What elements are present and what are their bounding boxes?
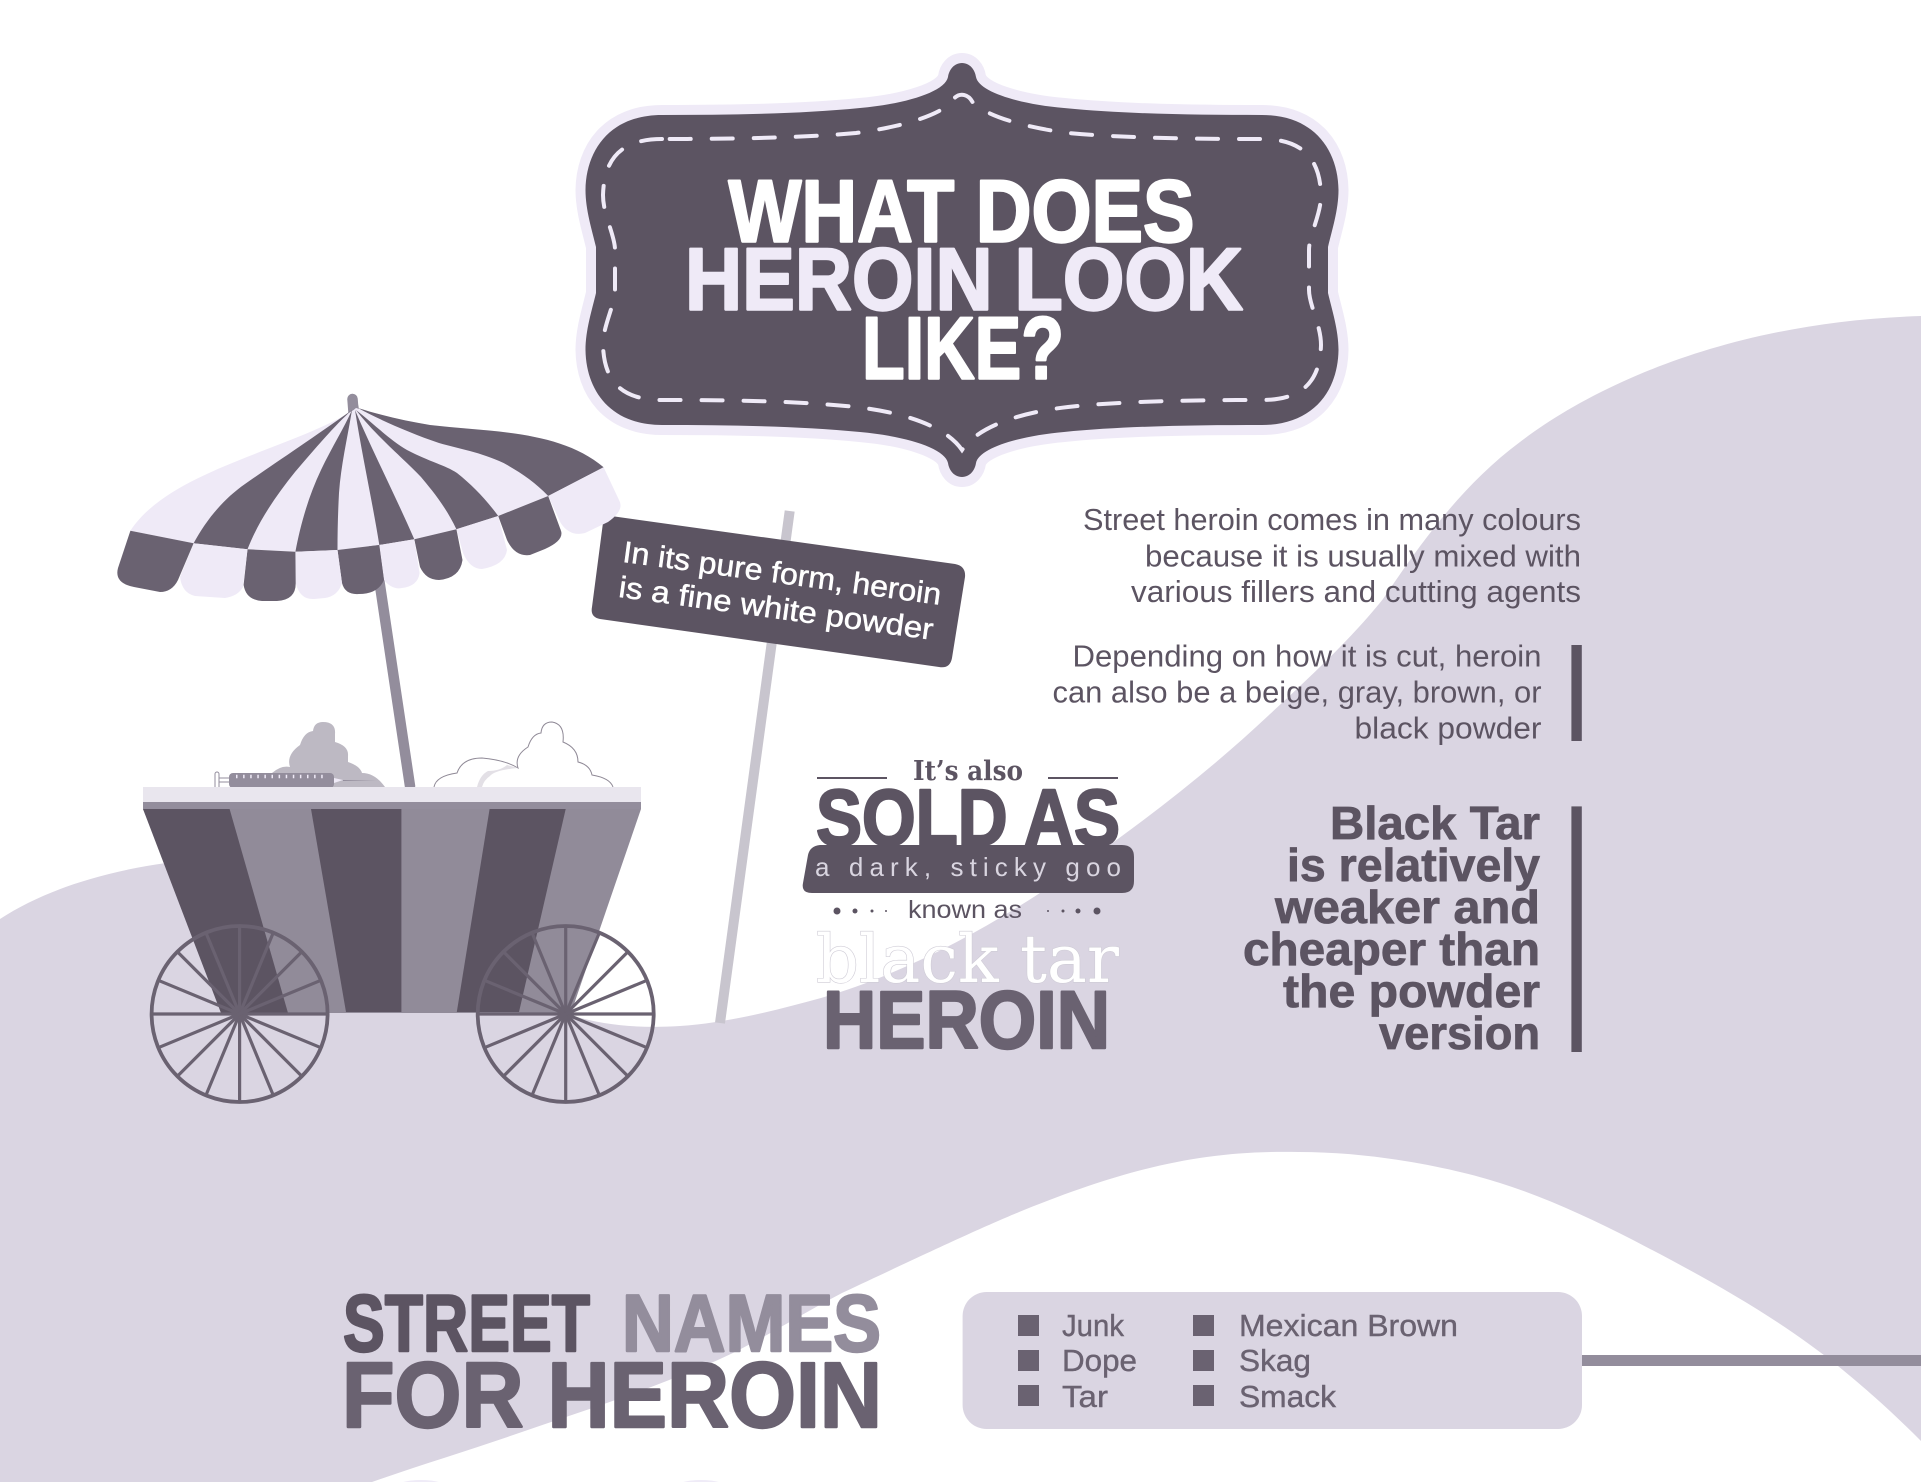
cart body light (143, 809, 641, 1013)
cart (143, 787, 654, 1102)
stitched dashed border (603, 95, 1321, 450)
names: Dope (1062, 1343, 1137, 1378)
names: Tar (1062, 1379, 1108, 1414)
text: many colours (1083, 502, 1581, 609)
text: black tar is weaker: cheaper than (1243, 923, 1540, 975)
title text: HEROIN LOOK (685, 230, 1243, 328)
black tar: black tar (816, 921, 1119, 998)
umbrella pole (352, 399, 410, 786)
dark powder pile (262, 722, 385, 787)
text: black tar is weaker: weaker and (1274, 881, 1540, 933)
title text (685, 162, 1243, 398)
text: black tar is weaker: version (1379, 1007, 1540, 1059)
rule left (817, 777, 887, 779)
it's also: It’s also (913, 756, 1023, 787)
wheel: right (478, 926, 654, 1102)
text: many colours: various fillers and cutting agents (1131, 574, 1581, 609)
text: black tar is weaker (1243, 797, 1540, 1059)
names: Skag (1239, 1343, 1311, 1378)
street names panel (963, 1292, 1582, 1429)
goo pill (803, 845, 1134, 893)
title text: LIKE? (862, 298, 1064, 398)
text: black tar is weaker: the powder (1283, 965, 1540, 1017)
text: depending on cut (1052, 638, 1542, 746)
umbrella (117, 399, 621, 786)
names: Junk (1062, 1308, 1124, 1343)
goo text: a dark, sticky goo (815, 852, 1121, 882)
signpost (592, 511, 965, 1023)
text: black tar is weaker: Black Tar (1330, 797, 1540, 849)
text: depending on cut: Depending on how it is cut, heroin (1072, 638, 1542, 673)
accent bar (1571, 645, 1582, 741)
bottom edge arcs (393, 1480, 729, 1482)
banner shape (586, 63, 1338, 477)
text: depending on cut: black powder (1354, 710, 1542, 746)
wheel: left (152, 926, 328, 1102)
street names heading: NAMES (622, 1279, 881, 1369)
names: Smack (1239, 1379, 1337, 1414)
cart board (143, 787, 641, 802)
white powder pile (434, 722, 613, 787)
sign text: is a fine white powder (617, 571, 935, 647)
rule right (1048, 777, 1118, 779)
accent bar (1571, 806, 1582, 1052)
street names heading: STREET (343, 1279, 590, 1369)
sold as: SOLD AS (816, 773, 1120, 862)
sign text (617, 536, 943, 647)
sign board (592, 515, 965, 667)
title text: WHAT DOES (728, 162, 1194, 260)
background wave (0, 316, 1921, 1482)
names: Mexican Brown (1239, 1308, 1458, 1343)
known as: known as (908, 896, 1022, 924)
canopy dark stripes (194, 408, 604, 552)
canopy scallops (117, 467, 621, 601)
title banner (586, 63, 1338, 477)
cart body dark stripes (143, 809, 566, 1013)
bullets (1018, 1315, 1214, 1406)
dotted row (834, 908, 1100, 914)
street names heading (342, 1279, 882, 1447)
canopy (130, 408, 604, 552)
sign pole (720, 511, 790, 1023)
text: black tar is weaker: is relatively (1287, 839, 1540, 891)
street names heading: FOR HEROIN (342, 1343, 882, 1447)
powder fold (477, 765, 518, 787)
connector bar (1582, 1355, 1921, 1366)
heroin: HEROIN (823, 975, 1110, 1066)
text: many colours: Street heroin comes in many colours (1083, 502, 1581, 537)
names (1062, 1308, 1458, 1414)
text: many colours: because it is usually mixed with (1145, 538, 1581, 574)
sign text: In its pure form, heroin (621, 536, 943, 612)
syringe (215, 772, 377, 789)
text: depending on cut: can also be a beige, gray, brown, or (1052, 675, 1542, 710)
black tar lockup (803, 756, 1134, 1066)
